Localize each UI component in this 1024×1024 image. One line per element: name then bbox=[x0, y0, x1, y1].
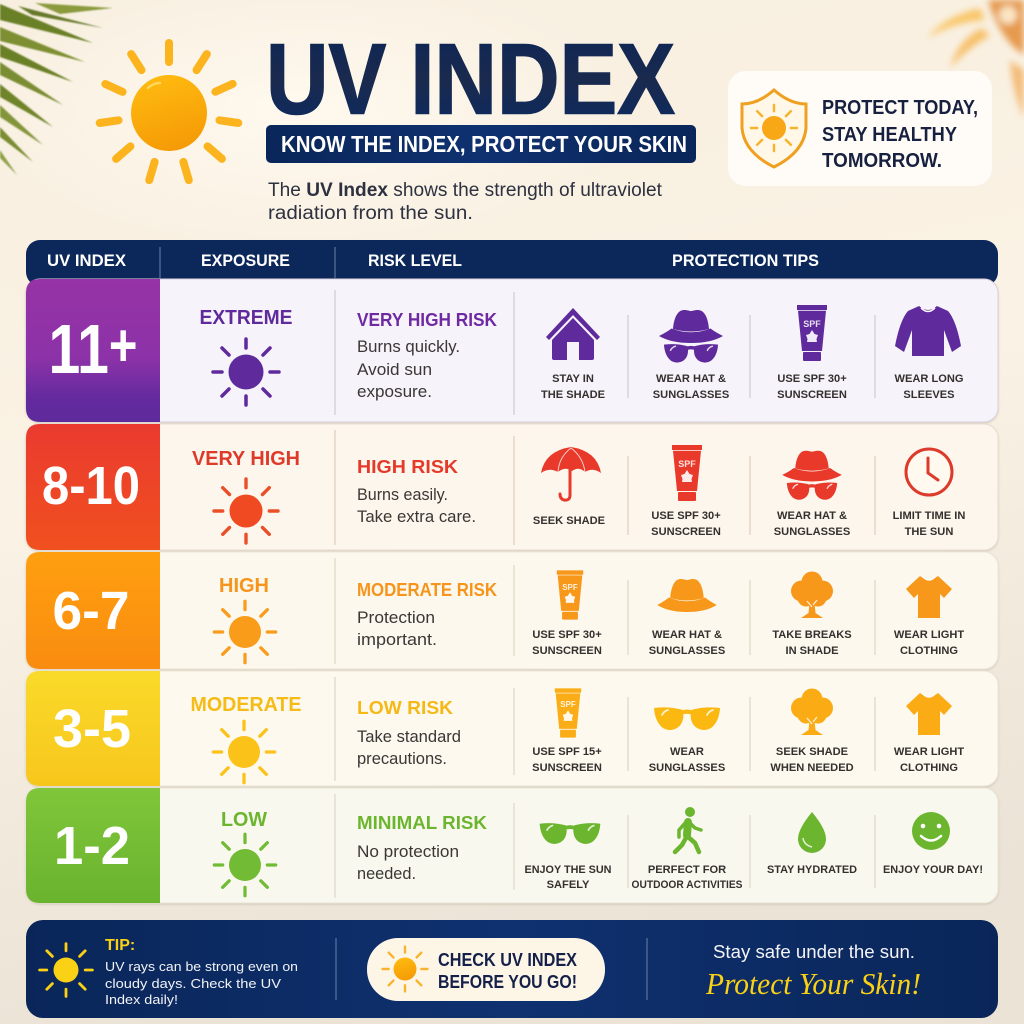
tip labels: WEAR LONG bbox=[894, 373, 964, 385]
icon: umbrella bbox=[541, 447, 601, 500]
risk text: MODERATE RISK bbox=[357, 579, 498, 600]
icon: shield bbox=[742, 90, 806, 167]
uv value bbox=[26, 671, 160, 786]
tip labels: USE SPF 30+ bbox=[532, 629, 602, 641]
title: UV INDEX bbox=[266, 24, 675, 136]
exposure bbox=[214, 575, 276, 663]
table header: UV INDEX bbox=[47, 251, 127, 270]
icon: sunscreen: SPF bbox=[562, 583, 578, 592]
icon: tree bbox=[791, 572, 833, 618]
tip labels: CLOTHING bbox=[900, 645, 958, 657]
tip labels: STAY IN bbox=[552, 373, 594, 385]
risk text: MINIMAL RISK bbox=[357, 812, 488, 833]
tip labels: SUNGLASSES bbox=[649, 645, 725, 657]
tip labels bbox=[532, 746, 964, 774]
icon: sunscreen bbox=[557, 570, 583, 620]
tip labels: THE SUN bbox=[905, 526, 953, 538]
risk text bbox=[357, 579, 498, 649]
check uv pill bbox=[367, 938, 605, 1001]
risk text: important. bbox=[357, 631, 437, 649]
tip labels: PERFECT FOR bbox=[648, 864, 726, 876]
intro text: radiation from the sun. bbox=[268, 203, 473, 224]
risk text bbox=[357, 812, 488, 883]
tip labels: SLEEVES bbox=[903, 389, 955, 401]
icon: sunscreen: SPF bbox=[803, 319, 821, 329]
icon: sunscreen: SPF bbox=[560, 700, 576, 709]
slogan: Stay safe under the sun. bbox=[713, 942, 915, 962]
callout text: PROTECT TODAY, bbox=[822, 97, 978, 119]
icon: sunglasses bbox=[540, 823, 600, 844]
tip labels: SUNSCREEN bbox=[532, 645, 602, 657]
tip labels: SAFELY bbox=[547, 879, 590, 891]
tip labels bbox=[533, 510, 965, 538]
tip labels: ENJOY THE SUN bbox=[524, 864, 612, 876]
icon: long sleeve bbox=[895, 306, 961, 356]
tip labels: WEAR HAT & bbox=[656, 373, 726, 385]
tip labels: THE SHADE bbox=[541, 389, 605, 401]
callout: protect today bbox=[728, 71, 992, 186]
intro text bbox=[268, 180, 663, 224]
tip labels: SUNSCREEN bbox=[777, 389, 847, 401]
tip labels: WEAR bbox=[670, 746, 704, 758]
icon: tee bbox=[906, 693, 952, 735]
tip labels: CLOTHING bbox=[900, 762, 958, 774]
icon: big sun bbox=[100, 43, 238, 180]
icon: clock bbox=[906, 449, 952, 495]
risk text: Burns easily. bbox=[357, 486, 448, 504]
exposure: HIGH bbox=[219, 575, 269, 597]
icon: sunscreen bbox=[797, 305, 827, 361]
table header: RISK LEVEL bbox=[368, 251, 462, 270]
risk text: No protection bbox=[357, 843, 459, 861]
callout text bbox=[822, 97, 978, 172]
icon: hat and sunglasses bbox=[659, 310, 723, 363]
exposure bbox=[214, 809, 276, 896]
tip labels: ENJOY YOUR DAY! bbox=[883, 864, 983, 876]
tip labels: WEAR LIGHT bbox=[894, 746, 964, 758]
uv value: + bbox=[109, 312, 138, 379]
uv value: 8-10 bbox=[42, 456, 140, 516]
tip labels: WEAR HAT & bbox=[777, 510, 847, 522]
tip labels: SUNSCREEN bbox=[651, 526, 721, 538]
row: extreme 11+ bbox=[26, 279, 998, 422]
icon: sunscreen bbox=[672, 445, 702, 501]
risk text: HIGH RISK bbox=[357, 456, 459, 477]
risk text: needed. bbox=[357, 865, 416, 883]
tip labels: IN SHADE bbox=[785, 645, 839, 657]
tip text bbox=[105, 937, 298, 1007]
icon: sunscreen: SPF bbox=[678, 459, 696, 469]
uv value bbox=[26, 788, 160, 903]
tip text: Index daily! bbox=[105, 992, 178, 1007]
risk text: VERY HIGH RISK bbox=[357, 309, 498, 330]
tip labels: USE SPF 30+ bbox=[651, 510, 721, 522]
tip text: cloudy days. Check the UV bbox=[105, 976, 281, 991]
icon: walker bbox=[675, 807, 701, 852]
icon: smiley bbox=[912, 812, 950, 850]
tip labels bbox=[541, 373, 964, 401]
exposure bbox=[200, 307, 292, 405]
tip labels: SUNGLASSES bbox=[649, 762, 725, 774]
tip labels: SUNSCREEN bbox=[532, 762, 602, 774]
risk text: Protection bbox=[357, 609, 435, 627]
icon: drop bbox=[798, 812, 826, 853]
uv value bbox=[26, 279, 160, 422]
risk text: Take standard bbox=[357, 728, 461, 746]
tip labels: WHEN NEEDED bbox=[770, 762, 854, 774]
icon: hat and sunglasses bbox=[782, 451, 842, 500]
tip labels: LIMIT TIME IN bbox=[893, 510, 965, 522]
uv value: 11 bbox=[48, 310, 122, 388]
risk text bbox=[357, 309, 498, 401]
callout text: STAY HEALTHY bbox=[822, 124, 958, 146]
risk text bbox=[357, 697, 461, 768]
row: very high 8-10 bbox=[26, 424, 998, 550]
table header: EXPOSURE bbox=[201, 251, 290, 270]
check uv pill: BEFORE YOU GO! bbox=[438, 972, 577, 992]
tip labels: SUNGLASSES bbox=[653, 389, 729, 401]
tip labels: TAKE BREAKS bbox=[772, 629, 852, 641]
row: moderate 3-5 bbox=[26, 671, 998, 786]
tip labels: STAY HYDRATED bbox=[767, 864, 857, 876]
risk text: LOW RISK bbox=[357, 697, 454, 718]
tip labels: SUNGLASSES bbox=[774, 526, 850, 538]
tip labels: OUTDOOR ACTIVITIES bbox=[632, 879, 742, 891]
tip labels: WEAR LIGHT bbox=[894, 629, 964, 641]
uv value bbox=[26, 552, 160, 669]
subtitle banner: KNOW THE INDEX, PROTECT YOUR SKIN bbox=[281, 131, 687, 157]
risk text: Take extra care. bbox=[357, 508, 476, 526]
exposure bbox=[192, 448, 300, 543]
uv value: 3-5 bbox=[53, 699, 131, 759]
exposure: MODERATE bbox=[190, 694, 302, 716]
exposure: LOW bbox=[221, 809, 267, 831]
callout text: TOMORROW. bbox=[822, 150, 942, 172]
exposure bbox=[190, 694, 302, 783]
footer banner bbox=[26, 920, 998, 1018]
tip labels: USE SPF 30+ bbox=[777, 373, 847, 385]
tip labels bbox=[524, 864, 983, 891]
tip text: TIP: bbox=[105, 937, 135, 954]
blurred orange palm top right bbox=[927, 0, 1024, 118]
tip labels: WEAR HAT & bbox=[652, 629, 722, 641]
exposure: EXTREME bbox=[200, 307, 292, 329]
risk text: Burns quickly. bbox=[357, 338, 460, 356]
icon: tree bbox=[791, 688, 833, 735]
tip labels: SEEK SHADE bbox=[533, 515, 605, 527]
tip text: UV rays can be strong even on bbox=[105, 959, 298, 974]
icon: house bbox=[546, 308, 600, 360]
icon: sunscreen bbox=[555, 688, 581, 738]
uv value: 6-7 bbox=[52, 581, 130, 641]
row: high 6-7 bbox=[26, 552, 998, 669]
risk text: precautions. bbox=[357, 750, 447, 768]
table header bbox=[26, 240, 998, 286]
table header: PROTECTION TIPS bbox=[672, 251, 819, 270]
slogan bbox=[705, 942, 921, 1001]
tip labels bbox=[532, 629, 964, 657]
tip labels: USE SPF 15+ bbox=[532, 746, 602, 758]
subtitle banner bbox=[266, 125, 696, 163]
uv value bbox=[26, 424, 160, 550]
row: low 1-2 bbox=[26, 788, 998, 903]
slogan: Protect Your Skin! bbox=[705, 966, 921, 1001]
check uv pill: CHECK UV INDEX bbox=[438, 950, 577, 970]
icon: sunglasses bbox=[654, 707, 720, 730]
tip labels: SEEK SHADE bbox=[776, 746, 848, 758]
risk text bbox=[357, 456, 476, 526]
risk text: exposure. bbox=[357, 383, 432, 401]
icon: footer sun bbox=[40, 944, 92, 996]
icon: tee bbox=[906, 576, 952, 618]
uv value: 1-2 bbox=[54, 816, 130, 876]
exposure: VERY HIGH bbox=[192, 448, 300, 470]
risk text: Avoid sun bbox=[357, 361, 432, 379]
icon: hat bbox=[657, 579, 717, 612]
palm leaves top left bbox=[0, 3, 113, 175]
intro text: The UV Index shows the strength of ultraviolet bbox=[268, 180, 663, 201]
